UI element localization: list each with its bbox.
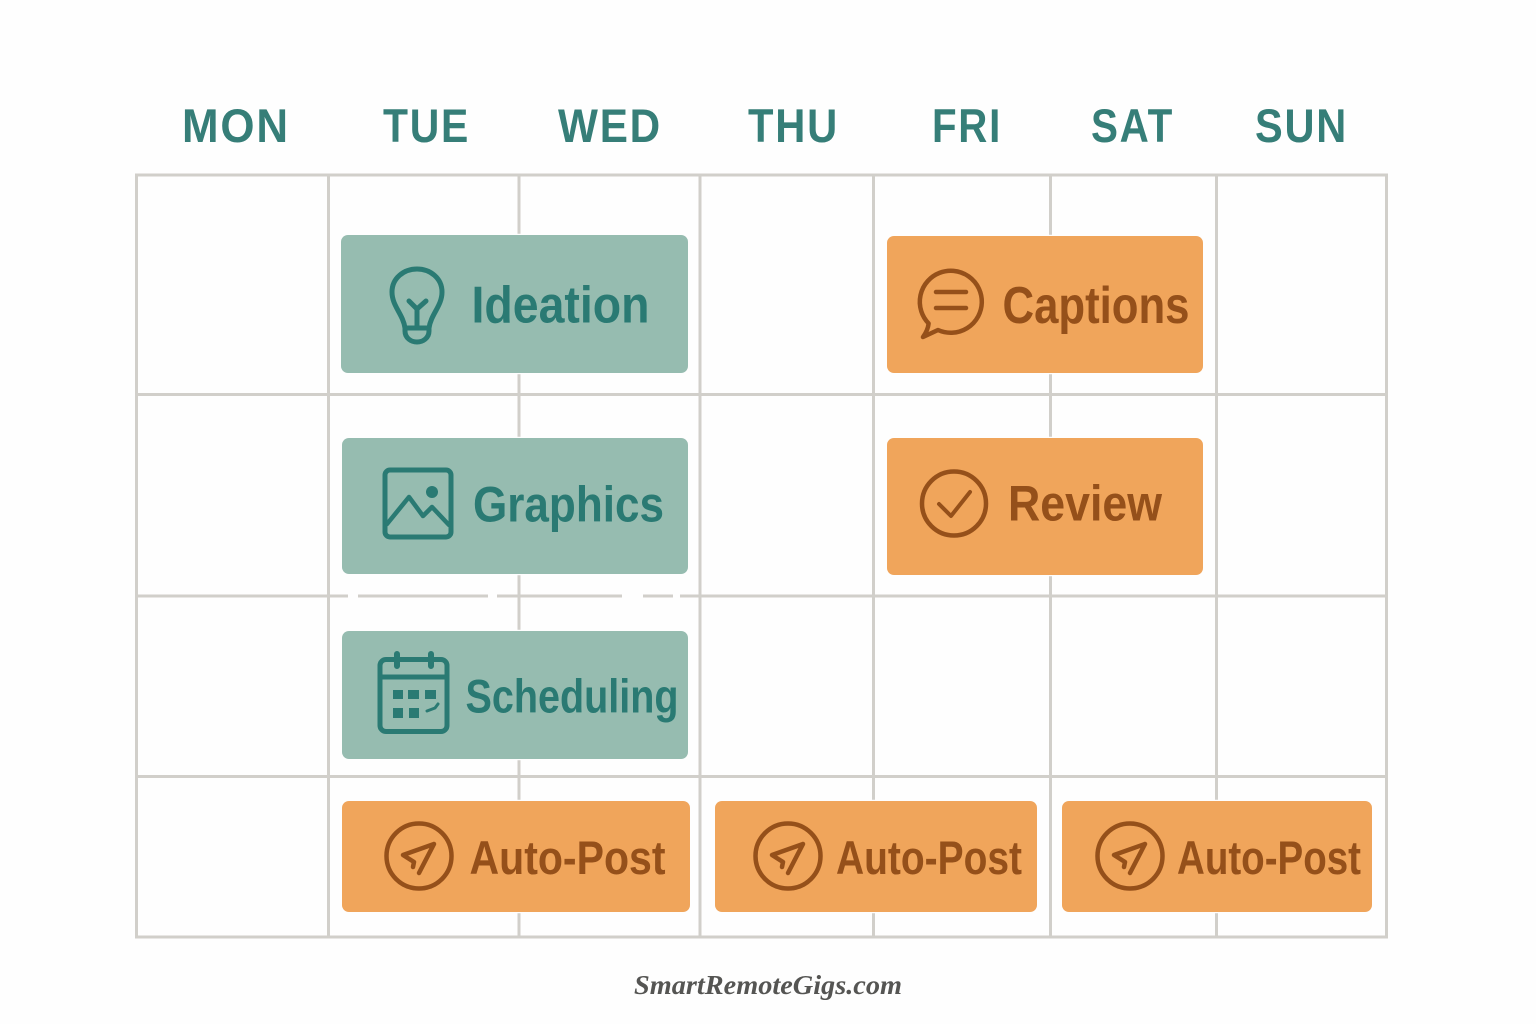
task: Auto-Post Tuesday xyxy=(342,801,690,912)
weekday headings xyxy=(182,99,1348,152)
footer website credit: SmartRemoteGigs.com xyxy=(634,970,902,1000)
icon: picture xyxy=(385,470,451,537)
task: Review xyxy=(887,438,1203,575)
weekday headings: WED xyxy=(558,99,662,152)
task: Auto-Post Thursday: Auto-Post xyxy=(836,831,1022,884)
task: Graphics xyxy=(342,438,688,574)
weekday headings: MON xyxy=(182,99,290,152)
task: Ideation: Ideation xyxy=(472,276,650,334)
task: Captions xyxy=(887,236,1203,373)
icon: check circle xyxy=(922,472,986,536)
weekday headings: SUN xyxy=(1255,99,1348,152)
icon: send arrow xyxy=(756,824,820,888)
icon: calendar xyxy=(380,654,447,732)
weekday headings: TUE xyxy=(383,99,470,152)
task: Auto-Post Saturday: Auto-Post xyxy=(1177,831,1361,884)
task: Graphics: Graphics xyxy=(473,476,664,532)
task: Scheduling xyxy=(342,631,688,759)
icon: light bulb xyxy=(392,269,442,342)
task: Captions: Captions xyxy=(1002,277,1190,335)
task: Auto-Post Saturday xyxy=(1062,801,1372,912)
weekday headings: FRI xyxy=(932,99,1002,152)
weekday headings: THU xyxy=(748,99,839,152)
calendar grid xyxy=(136,175,1386,937)
weekday headings: SAT xyxy=(1091,99,1174,152)
task: Auto-Post Tuesday: Auto-Post xyxy=(470,831,666,884)
task: Ideation xyxy=(341,235,688,373)
task: Review: Review xyxy=(1008,476,1162,532)
task: Scheduling: Scheduling xyxy=(466,670,678,722)
task: Auto-Post Thursday xyxy=(715,801,1037,912)
icon: send arrow xyxy=(386,824,452,888)
icon: send arrow xyxy=(1098,824,1162,888)
icon: speech bubble xyxy=(920,271,982,337)
